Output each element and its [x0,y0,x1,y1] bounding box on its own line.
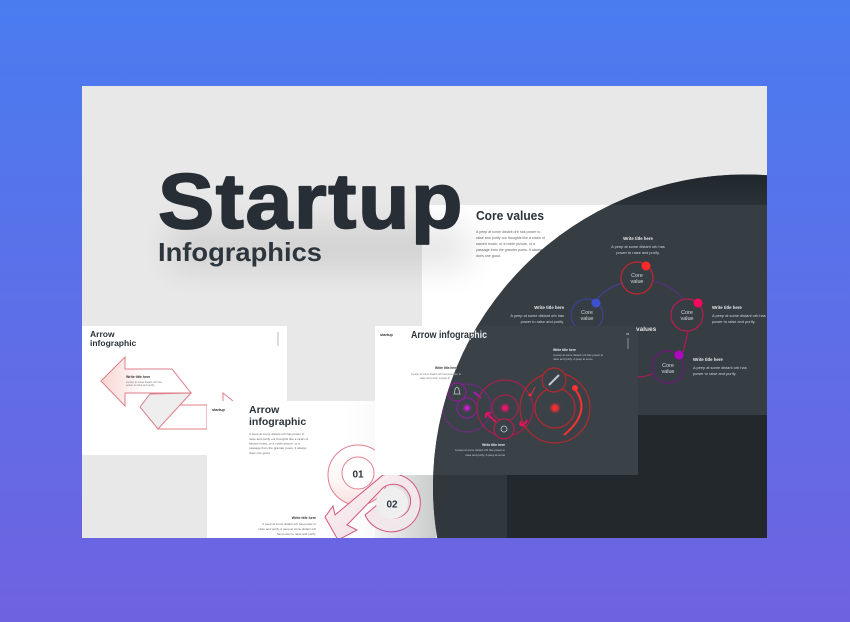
caption left: power to raise and purify. [521,319,564,324]
arrow slide paragraph [249,432,308,455]
caption lower right: A peep at some distant orb has [693,365,747,370]
caption bottom: Write title here [292,516,316,520]
panel: dark core values slide [422,205,767,415]
title soft shadow [170,225,470,270]
core values paragraph [476,230,545,258]
core value node right: Core [681,310,693,316]
arrow slide heading: Arrow [249,404,280,416]
caption left [510,305,565,324]
caption lower: raise and purify. A peep at some [465,453,505,457]
panel: front arrow slide dark part [433,326,638,475]
hidden heading fragment: values [636,326,657,333]
outline arrow left [101,357,191,406]
panel: left arrow slide [82,326,287,455]
caption right: power to raise and purify. [712,319,755,324]
core values paragraph: does one good. [476,254,501,258]
caption top: A peep at some distant orb has [611,244,665,249]
left slide text: Write title here [126,375,150,379]
caption left: A peep at some distant orb has [510,313,564,318]
caption top: power to raise and purify. [616,250,660,255]
pager [628,338,629,349]
caption top [611,236,665,255]
core value node right [671,298,703,331]
panel: front arrow slide light part: Arrow infographic [411,330,487,341]
arrow slide paragraph: sacred music, or a noble picture, or a [249,442,300,446]
core value node bottom: Core [662,363,674,369]
core value node left: Core [581,310,593,316]
spiral 01: 01 [352,470,364,480]
panel: core values light slide [422,205,610,326]
core value connector arcs [597,281,688,377]
spiral 02 with arrow: 02 [386,500,398,510]
arrow slide paragraph: A peep at some distant orb has power to [249,432,305,436]
caption bottom: raise and purify. A peep at some distant orb [259,527,316,531]
main title: Startup [158,159,464,245]
subtitle: Infographics [158,237,322,267]
panel: front arrow slide dark part: 05 [626,332,630,336]
arrow slide paragraph: does one good. [249,451,270,455]
core values paragraph: A peep at some distant orb has power to [476,230,540,234]
caption lower: A peep at some distant orb has power to [455,448,505,452]
arrow slide paragraph: raise and purify our thoughts like a strain of [249,437,308,441]
arrow slide paragraph: passage from the grander poets. It always [249,446,307,450]
core value node left: value [581,316,593,322]
startup label: startup [212,408,226,412]
caption top: Write title here [623,236,653,241]
caption lower [455,443,505,457]
red thick arc arrow [564,389,581,435]
caption right [712,305,766,324]
caption fragment on dark: Write title here [435,366,457,370]
pink arrow left [486,413,496,422]
panel: 01 02 arrow slide [207,401,436,540]
core value node top [621,262,653,294]
outline arrow lower band [158,405,207,429]
arrow slide heading: infographic [249,416,306,428]
left slide heading: infographic [90,338,137,348]
main title [160,172,460,266]
left slide pager [278,332,279,346]
left slide text: A peep at some distant orb has [126,380,162,384]
caption bottom: has power to raise and purify. [277,532,316,536]
left slide heading: Arrow [90,329,115,339]
core values paragraph: raise and purify our thoughts like a strain of [476,236,545,240]
core values paragraph: passage from the grander poets. It always [476,248,543,252]
caption top: raise and purify. A peep at some [553,357,593,361]
caption lower: Write title here [482,443,505,447]
core values heading: Core values [476,208,544,223]
core values paragraph: sacred music, or a noble picture, or a [476,242,535,246]
caption top: A peep at some distant orb has power to [553,353,604,357]
outline arrow gray fold [140,393,191,429]
left slide text: power to raise and purify. [126,383,155,387]
panel: front arrow slide light part: A peep at some distant orb has power to [411,372,458,376]
caption lower right: Write title here [693,357,723,362]
spiral 02 with arrow [325,474,420,540]
core value node left [571,298,603,331]
caption top [553,348,604,361]
purple ring cluster [443,383,491,432]
core value node top: Core [631,273,643,279]
caption right: Write title here [712,305,742,310]
main slide panel [82,86,770,540]
core value node top: value [631,279,643,285]
caption fragment on dark: raise and purify. A peep at [420,376,452,380]
caption lower right: power to raise and purify. [693,371,736,376]
core value node bottom: value [662,369,674,375]
panel: front arrow slide light part [375,326,474,475]
caption top: Write title here [553,348,576,352]
panel: front arrow slide light part: raise and purify. A peep at [420,376,450,380]
caption right: A peep at some distant orb has [712,313,766,318]
caption bottom: A peep at some distant orb has power to [262,522,316,526]
core value node bottom [652,350,684,383]
caption fragment on dark: A peep at some distant orb has power to [411,372,462,376]
caption bottom [259,516,316,536]
pink ring cluster [477,380,533,439]
panel: front arrow slide light part: startup [380,333,394,337]
pink arrow right [520,420,527,426]
caption fragment on dark [452,367,461,379]
panel: front arrow slide light part: Write title here [435,366,457,370]
caption lower right [693,357,747,376]
spiral 01 [328,445,388,505]
core value node right: value [681,316,693,322]
red ring cluster [520,368,590,443]
heading on dark: Arrow infographic [411,330,487,341]
left slide text [126,375,162,387]
caption left: Write title here [534,305,565,310]
dark circle overlay [433,174,767,538]
arrow tip fragment [223,393,233,402]
